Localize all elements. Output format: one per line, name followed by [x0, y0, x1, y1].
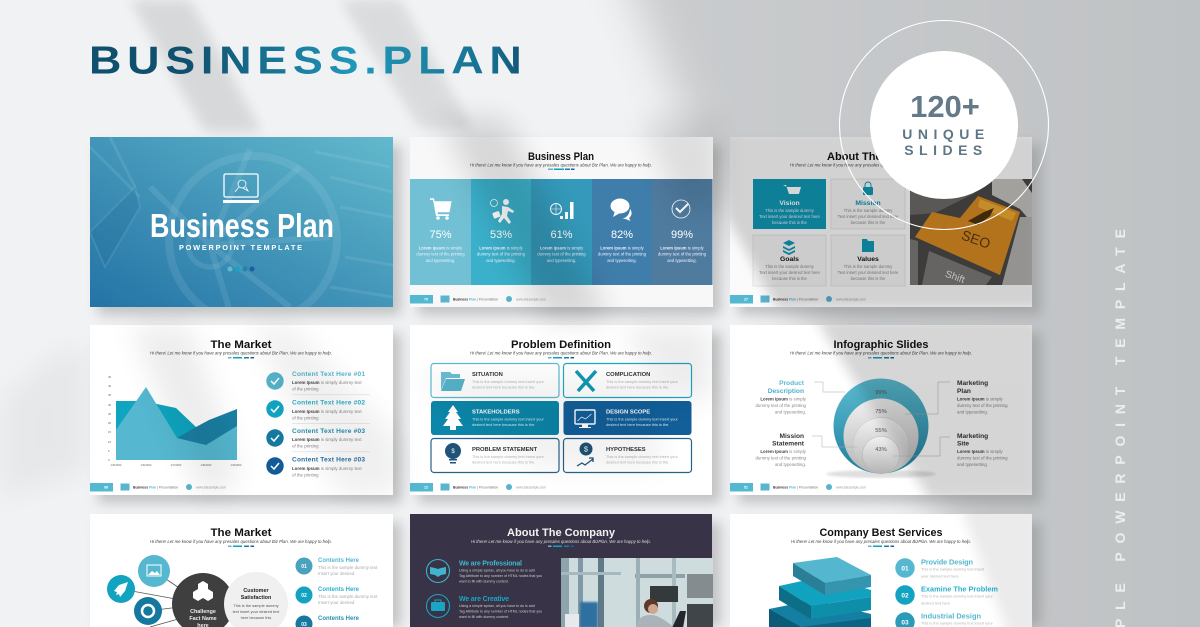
customer satisfaction circle: text insert your desired text	[233, 609, 280, 614]
percentages: 75%	[429, 229, 452, 241]
card: design scope: DESIGN SCOPE	[606, 410, 650, 416]
card: situation: desired text here because this is the.	[472, 384, 535, 390]
footer	[730, 295, 866, 304]
card: problem statement	[431, 438, 559, 472]
customer satisfaction circle: here because this	[241, 615, 271, 620]
item 02: Examine The Problem	[921, 584, 998, 594]
card: hypotheses	[564, 438, 692, 472]
slide shadows	[98, 145, 1041, 627]
text: marketing site: Lorem Ipsum is simply	[957, 449, 1003, 454]
card: problem statement: $	[451, 449, 455, 455]
footer: Business Plan | Presentation	[773, 298, 818, 302]
column text: Lorem Ipsum is simply	[419, 246, 463, 250]
area chart: 15	[108, 430, 112, 434]
area chart: 1/6/2002	[141, 463, 152, 467]
footer: www.sitesample.com	[516, 486, 546, 490]
dashes	[548, 546, 574, 547]
icon circle: lifebuoy	[134, 597, 162, 625]
text: professional: Tag Attribute to any number of HTML nodes that you	[459, 574, 542, 578]
list: contents: Contents Here	[318, 616, 360, 622]
column text: dummy text of the printing	[477, 252, 526, 256]
card: complication: COMPLICATION	[606, 372, 650, 378]
heading: Problem Definition	[511, 339, 611, 351]
card: goals: This is the sample dummy	[765, 264, 815, 269]
challenge circle: Fact Name	[189, 616, 217, 622]
text: product description: dummy text of the printing	[755, 403, 807, 408]
icon: handshake	[426, 560, 450, 582]
card: mission	[831, 179, 905, 229]
icon: laptop search	[223, 174, 259, 203]
card: vision: Vision	[779, 200, 800, 207]
card: values: because this is the	[851, 276, 886, 281]
text: product description	[755, 380, 807, 414]
card: goals: Text insert your desired text here	[759, 270, 821, 275]
text: marketing site: Marketing	[957, 433, 988, 440]
list: content items: of the printing	[292, 386, 319, 392]
card: goals	[753, 235, 826, 286]
heading: The Market	[210, 527, 272, 539]
column text: Lorem Ipsum is simply	[600, 246, 645, 250]
item 03: 03	[901, 620, 909, 626]
area chart: 30	[108, 403, 112, 407]
column text: dummy text of the printing	[537, 252, 586, 256]
list: content items: of the printing	[292, 416, 319, 420]
column text: and typesetting.	[426, 258, 455, 263]
card: hypotheses: $	[584, 446, 588, 454]
badge: 120+ unique slides: SLIDES	[904, 142, 988, 158]
text: marketing plan: Plan	[957, 388, 971, 395]
card: values: Values	[857, 256, 879, 263]
percentages: 61%	[550, 229, 573, 241]
text: marketing site: and typesetting.	[957, 462, 988, 467]
heading: Business Plan	[528, 151, 594, 163]
dashes	[868, 546, 894, 547]
badge: 120+ unique slides	[840, 20, 1048, 230]
heading: Infographic Slides	[834, 339, 928, 351]
subtitle: Hi there! Let me know if you have any presales questions about Biz Plan. We are happy to help.	[470, 350, 652, 356]
slide: cover	[90, 137, 393, 324]
text: professional: want to fill with dummy content.	[459, 580, 509, 584]
photo: SEO keyboard: SEO	[959, 227, 993, 252]
column text	[416, 246, 707, 263]
text: mission statement: Mission	[779, 433, 804, 440]
text: product description: Product	[779, 380, 805, 387]
photo: factory engineer	[561, 558, 713, 627]
list: content items: of the printing	[292, 472, 319, 478]
item 03: Industrial Design	[921, 612, 981, 620]
slide: problem definition	[410, 325, 712, 495]
card: design scope: This is the sample dummy text insert your	[606, 416, 678, 422]
nested sphere chart: 75%	[875, 409, 887, 415]
card: hypotheses: This is the sample dummy text insert your	[606, 454, 678, 459]
text: professional	[459, 560, 542, 584]
text: product description: Description	[768, 388, 804, 395]
card: values: Text insert your desired text here	[838, 270, 899, 275]
percentages: 53%	[490, 229, 512, 241]
list: content items: Lorem Ipsum is simply dummy text	[292, 437, 362, 442]
card: goals: because this is the	[772, 276, 808, 281]
subtitle: Hi there! Let me know if you have any presales questions about BizPlan. We are happy to help.	[471, 539, 651, 544]
window light shadows	[130, 120, 1040, 627]
footer	[730, 483, 866, 492]
list: contents: Contents Here	[318, 558, 360, 564]
list: contents	[296, 558, 378, 627]
card: stakeholders: STAKEHOLDERS	[472, 410, 520, 416]
card: situation	[431, 364, 559, 398]
item 01: 01	[901, 566, 909, 572]
column text: and typesetting.	[667, 258, 697, 263]
dashes	[548, 168, 574, 170]
subtitle: Hi there! Let me know if you have any presales questions about Biz Plan. We are happy to help.	[790, 350, 972, 356]
item 02: 02	[901, 592, 909, 600]
customer satisfaction circle	[224, 572, 288, 627]
list: contents: 02	[301, 593, 307, 599]
card: hypotheses: HYPOTHESES	[606, 447, 646, 453]
text: product description: Lorem Ipsum is simply	[760, 396, 807, 402]
list: content items: Content Text Here #03	[292, 428, 365, 435]
nested sphere chart: 43%	[875, 447, 887, 453]
text: creative	[459, 596, 542, 619]
list: contents: This is the sample dummy text	[318, 565, 378, 570]
card: stakeholders: desired text here because this is the.	[472, 422, 535, 427]
heading: The Market	[210, 339, 272, 351]
subtitle: Hi there! Let me know if you have any presales questions about Biz Plan. We are happy to help.	[150, 539, 332, 544]
list: contents: Insert your desired	[318, 571, 355, 576]
footer: www.sitesample.com	[196, 486, 226, 490]
list: contents: Contents Here	[318, 587, 360, 593]
card: vision: Text insert your desired text here	[759, 214, 821, 219]
heading: About The Company	[507, 527, 616, 539]
area chart: 0	[108, 458, 110, 462]
column text: dummy text of the printing	[658, 252, 707, 256]
column text: and typesetting.	[607, 258, 637, 263]
text: creative: We are Creative	[459, 596, 509, 603]
vertical caption: PLE POWERPOINT TEMPLATE	[1112, 229, 1128, 627]
item 03	[895, 612, 993, 627]
customer satisfaction circle: This is the sample dummy	[233, 603, 279, 608]
card: complication: This is the sample dummy text insert your	[606, 379, 678, 384]
photo: SEO keyboard: Shift	[944, 269, 966, 286]
card: stakeholders	[431, 401, 559, 435]
percentages	[429, 229, 693, 241]
text: professional: Using a simple syntax, all you have to do is add	[459, 568, 535, 572]
slide: company best services	[730, 514, 1032, 627]
card: hypotheses: desired text here because this is the.	[606, 460, 669, 464]
text: creative: Using a simple syntax, all you have to do is add	[459, 604, 535, 608]
badge: 120+ unique slides: UNIQUE	[902, 126, 990, 142]
text: marketing plan: Marketing	[957, 380, 988, 387]
footer: Business Plan | Presentation	[453, 486, 498, 490]
badge: 120+ unique slides: 120+	[910, 89, 980, 124]
item 02	[895, 584, 998, 606]
list: content items: Lorem Ipsum is simply dummy text	[292, 466, 362, 471]
subtitle: Hi there! Let me know if you have any presales questions about Biz Plan. We are happy to help.	[470, 162, 652, 168]
card: complication: desired text here because this is the.	[606, 384, 669, 390]
text: marketing plan: Lorem Ipsum is simply	[957, 396, 1003, 402]
card: goals: Goals	[780, 256, 799, 263]
footer: 51	[744, 486, 748, 490]
icon: briefcase	[426, 594, 450, 618]
card: design scope	[564, 401, 692, 435]
list: contents: This is the sample dummy text	[318, 594, 378, 599]
icon circle: rocket	[107, 575, 135, 603]
connectors	[812, 382, 950, 456]
text: creative: want to fill with dummy content.	[459, 615, 509, 619]
item 03: This is the sample dummy text insert your	[921, 620, 993, 626]
slide: business plan stats	[410, 137, 713, 307]
footer: Business Plan | Presentation	[773, 486, 818, 490]
card: vision: This is the sample dummy	[765, 208, 815, 213]
icon: runner	[490, 199, 514, 224]
card: mission: Text insert your desired text here	[838, 214, 899, 219]
card: problem statement: PROBLEM STATEMENT	[472, 447, 538, 453]
dashes	[868, 357, 894, 358]
text: mission statement	[755, 433, 807, 467]
item 02: This is the sample dummy text insert your	[921, 594, 993, 598]
text: marketing plan: dummy text of the printing	[957, 403, 1008, 408]
column text: and typesetting.	[486, 258, 516, 263]
card: mission: because this is the	[851, 220, 886, 225]
card: problem statement: This is the sample dummy text insert your	[472, 454, 544, 459]
area chart: 25	[108, 412, 112, 416]
card: mission: This is the sample dummy	[844, 208, 893, 213]
subtitle: Hi there! Let me know if you have any presales questions about BizPlan. We are happy to help.	[791, 539, 971, 544]
footer: Business Plan | Presentation	[133, 486, 178, 490]
card: situation: SITUATION	[472, 372, 503, 378]
connectors	[134, 580, 178, 627]
challenge circle	[172, 573, 234, 627]
footer: Business Plan | Presentation	[453, 298, 498, 302]
area chart: 35	[108, 393, 112, 397]
area chart: 40	[108, 384, 112, 388]
text: marketing plan: and typesetting.	[957, 410, 988, 414]
cover title: Business Plan	[150, 207, 334, 244]
footer	[410, 295, 546, 304]
heading: Company Best Services	[820, 527, 942, 539]
area chart	[108, 375, 242, 467]
text: creative: Tag Attribute to any number of HTML nodes that you	[459, 610, 542, 614]
text: marketing site	[957, 433, 1008, 467]
area chart: 1/9/2002	[231, 463, 242, 467]
item 01: This is the sample dummy text insert	[921, 566, 985, 572]
slide: about the company	[730, 137, 1032, 307]
footer: www.sitesample.com	[516, 298, 546, 302]
footer: 70	[424, 298, 428, 302]
card: values	[831, 235, 905, 286]
footer: 12	[424, 486, 428, 490]
area chart: 45	[108, 375, 112, 379]
area chart: 5	[108, 449, 110, 453]
icon circle: picture	[138, 555, 170, 587]
customer satisfaction circle: Customer	[243, 588, 269, 594]
slide: infographic slides	[730, 325, 1032, 495]
footer: www.sitesample.com	[836, 298, 866, 302]
column text: Lorem Ipsum is simply	[540, 246, 584, 250]
text: mission statement: and typesetting.	[775, 462, 806, 467]
stacked blocks	[769, 557, 871, 627]
footer: 27	[744, 298, 748, 302]
nested sphere chart	[826, 378, 936, 478]
list: content items: Lorem Ipsum is simply dummy text	[292, 409, 362, 414]
heading: About The Company	[827, 151, 936, 163]
stat columns	[410, 179, 712, 285]
card: vision: because this is the	[772, 220, 808, 225]
text: professional: We are Professional	[459, 560, 522, 568]
list: contents: Insert your desired	[318, 600, 355, 605]
card: situation: This is the sample dummy text insert your	[472, 379, 544, 384]
dashes	[228, 357, 254, 358]
nested sphere chart: 55%	[875, 428, 887, 434]
icon: speech bubbles	[610, 198, 632, 221]
percentages: 99%	[671, 229, 693, 241]
card: complication	[564, 364, 692, 398]
footer	[90, 483, 226, 492]
dashes	[228, 546, 254, 547]
slide: the market chart	[90, 325, 393, 495]
icon: cart	[430, 198, 452, 220]
challenge circle: Challenge	[190, 609, 216, 615]
item 01	[895, 558, 985, 578]
text: marketing site: dummy text of the printing	[957, 456, 1008, 460]
customer satisfaction circle: Satisfaction	[241, 595, 271, 601]
item 01: Provide Design	[921, 558, 973, 566]
list: content items: Lorem Ipsum is simply dummy text	[292, 380, 362, 385]
area chart: 1/8/2002	[201, 463, 212, 467]
icon: check	[672, 200, 690, 218]
text: mission statement: dummy text of the printing	[755, 456, 807, 460]
nested sphere chart: 99%	[875, 390, 887, 396]
text: mission statement: Lorem Ipsum is simply	[760, 449, 807, 454]
card: vision	[753, 179, 826, 229]
slide: about the company dark	[410, 514, 713, 627]
cover subtitle: POWERPOINT TEMPLATE	[179, 243, 302, 252]
card: mission: Mission	[855, 200, 881, 207]
area chart: 1/7/2002	[171, 463, 182, 467]
text: product description: and typesetting.	[775, 410, 806, 414]
column text: and typesetting.	[547, 258, 576, 263]
icon: globe bars	[550, 202, 574, 219]
item 02: desired text here	[921, 600, 950, 606]
pagination dots	[228, 266, 254, 272]
list: content items	[266, 371, 370, 478]
text: marketing site: Site	[957, 440, 969, 448]
area chart: 1/5/2002	[111, 463, 122, 467]
card: stakeholders: This is the sample dummy text insert your	[472, 416, 544, 422]
dashes	[548, 357, 574, 358]
list: content items: of the printing	[292, 444, 319, 448]
main title: BUSINESS.PLAN	[89, 38, 527, 82]
card: values: This is the sample dummy	[844, 264, 893, 269]
subtitle: Hi there! Let me know if you have any presales questions about Biz Plan. We are happy to help.	[150, 350, 332, 356]
column text: Lorem Ipsum is simply	[660, 246, 705, 250]
list: content items: Content Text Here #03	[292, 456, 365, 464]
list: content items: Content Text Here #01	[292, 371, 365, 378]
percentages: 82%	[611, 229, 633, 241]
slide: the market network	[90, 514, 393, 627]
list: content items: Content Text Here #02	[292, 400, 365, 406]
subtitle: Hi there! Let me know if you have any presales questions about Biz Plan. We are happy to help.	[790, 162, 972, 168]
footer: 98	[104, 486, 108, 490]
area chart: 20	[108, 421, 112, 425]
card: problem statement: desired text here because this is the.	[472, 460, 535, 464]
text: marketing plan	[957, 380, 1008, 414]
item 01: your desired text here	[921, 574, 959, 578]
wheel texture	[90, 137, 393, 324]
column text: Lorem Ipsum is simply	[479, 246, 524, 250]
column text: dummy text of the printing	[598, 252, 647, 256]
card: design scope: desired text here because this is the.	[606, 422, 669, 427]
text: mission statement: Statement	[772, 440, 805, 448]
area chart: 10	[108, 440, 112, 444]
list: contents: 01	[301, 564, 307, 570]
footer: www.sitesample.com	[836, 486, 866, 490]
photo: SEO keyboard	[910, 179, 1032, 286]
column text: dummy text of the printing	[416, 252, 465, 256]
footer	[410, 483, 546, 492]
